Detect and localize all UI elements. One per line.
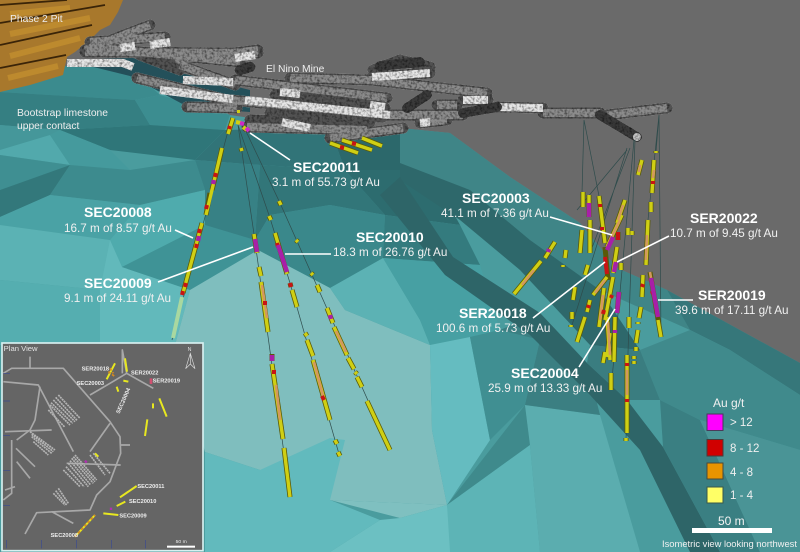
inset hole labels: SER20019 bbox=[153, 379, 180, 385]
scale bar: 50 m: 50 m bbox=[718, 514, 745, 528]
phase 2 pit bbox=[0, 0, 123, 92]
el nino mine workings bbox=[67, 25, 667, 141]
north arrow: N bbox=[188, 347, 192, 353]
callout: SEC20008: SEC20008 bbox=[84, 204, 152, 220]
scale bar: 50 m bbox=[692, 514, 772, 533]
legend: Au g/t: 1 - 4 bbox=[730, 490, 754, 502]
callout: SEC20003: 41.1 m of 7.36 g/t Au bbox=[441, 207, 549, 220]
inset scale bar: 50 m bbox=[176, 539, 187, 545]
callout: SER20019 bbox=[658, 287, 788, 317]
legend: Au g/t bbox=[707, 396, 759, 503]
callout: SEC20003 bbox=[441, 190, 612, 235]
legend: Au g/t: > 12 bbox=[730, 417, 753, 429]
callout: SER20018: SER20018 bbox=[459, 305, 527, 321]
callout: SEC20011: 3.1 m of 55.73 g/t Au bbox=[272, 176, 380, 189]
legend: Au g/t: Au g/t bbox=[713, 396, 745, 410]
label: phase 2 pit: Phase 2 Pit bbox=[10, 14, 63, 25]
callout: SER20019: 39.6 m of 17.11 g/t Au bbox=[675, 304, 788, 317]
inset ticks bbox=[3, 373, 146, 548]
label: bootstrap limestone: Bootstrap limestone bbox=[17, 108, 108, 119]
callout: SEC20004 bbox=[488, 309, 615, 395]
callout: SEC20010: 18.3 m of 26.76 g/t Au bbox=[333, 246, 447, 259]
callout: SER20022: 10.7 m of 9.45 g/t Au bbox=[670, 227, 778, 240]
inset scale bar bbox=[167, 539, 195, 548]
inset title: Plan View bbox=[4, 344, 38, 353]
drill hole trajectories bbox=[172, 115, 661, 497]
callout: SEC20009: 9.1 m of 24.11 g/t Au bbox=[64, 292, 171, 305]
callout: SER20018 bbox=[436, 262, 605, 335]
inset hole labels bbox=[51, 366, 180, 539]
callout: SEC20008: 16.7 m of 8.57 g/t Au bbox=[64, 222, 172, 235]
label: bootstrap limestone: upper contact bbox=[17, 121, 80, 132]
callout: SER20022 bbox=[617, 210, 778, 262]
inset hole labels: SER20022 bbox=[131, 371, 158, 377]
callout: SEC20010: SEC20010 bbox=[356, 229, 424, 245]
callout: SEC20004: SEC20004 bbox=[511, 365, 579, 381]
inset hole labels: SER20018 bbox=[82, 366, 109, 372]
inset hole labels: SEC20010 bbox=[129, 499, 156, 505]
callout: SEC20009 bbox=[64, 247, 253, 305]
callout: SEC20004: 25.9 m of 13.33 g/t Au bbox=[488, 382, 602, 395]
callout: SER20018: 100.6 m of 5.73 g/t Au bbox=[436, 322, 550, 335]
inset hole labels: SEC20008 bbox=[51, 533, 78, 539]
drill holes: right fan bbox=[514, 151, 661, 441]
underground tunnels bbox=[3, 350, 153, 534]
view note: Isometric view looking northwest bbox=[662, 538, 797, 549]
collar cluster bbox=[236, 110, 249, 131]
dark cavity behind mine bbox=[65, 58, 250, 112]
callout: SEC20011 bbox=[250, 133, 380, 189]
callout: SEC20011: SEC20011 bbox=[293, 159, 360, 175]
legend: Au g/t: 8 - 12 bbox=[730, 443, 759, 455]
inset hole labels: SEC20009 bbox=[119, 514, 147, 520]
inset hole labels: SEC20004 bbox=[116, 387, 133, 415]
callout: SEC20008 bbox=[64, 204, 193, 238]
legend: Au g/t: 4 - 8 bbox=[730, 467, 753, 479]
drill holes: left fan bbox=[173, 118, 390, 497]
inset hole labels: SEC20011 bbox=[137, 484, 164, 490]
callout: SEC20003: SEC20003 bbox=[462, 190, 530, 206]
callout: SEC20009: SEC20009 bbox=[84, 275, 152, 291]
label: el nino mine: El Nino Mine bbox=[266, 64, 325, 75]
inset drill traces bbox=[75, 358, 167, 537]
callout: SEC20010 bbox=[285, 229, 447, 259]
plan view inset bbox=[2, 343, 203, 551]
callout: SER20019: SER20019 bbox=[698, 287, 766, 303]
north arrow bbox=[186, 347, 195, 369]
callout: SER20022: SER20022 bbox=[690, 210, 758, 226]
inset hole labels: SEC20003 bbox=[77, 381, 104, 387]
